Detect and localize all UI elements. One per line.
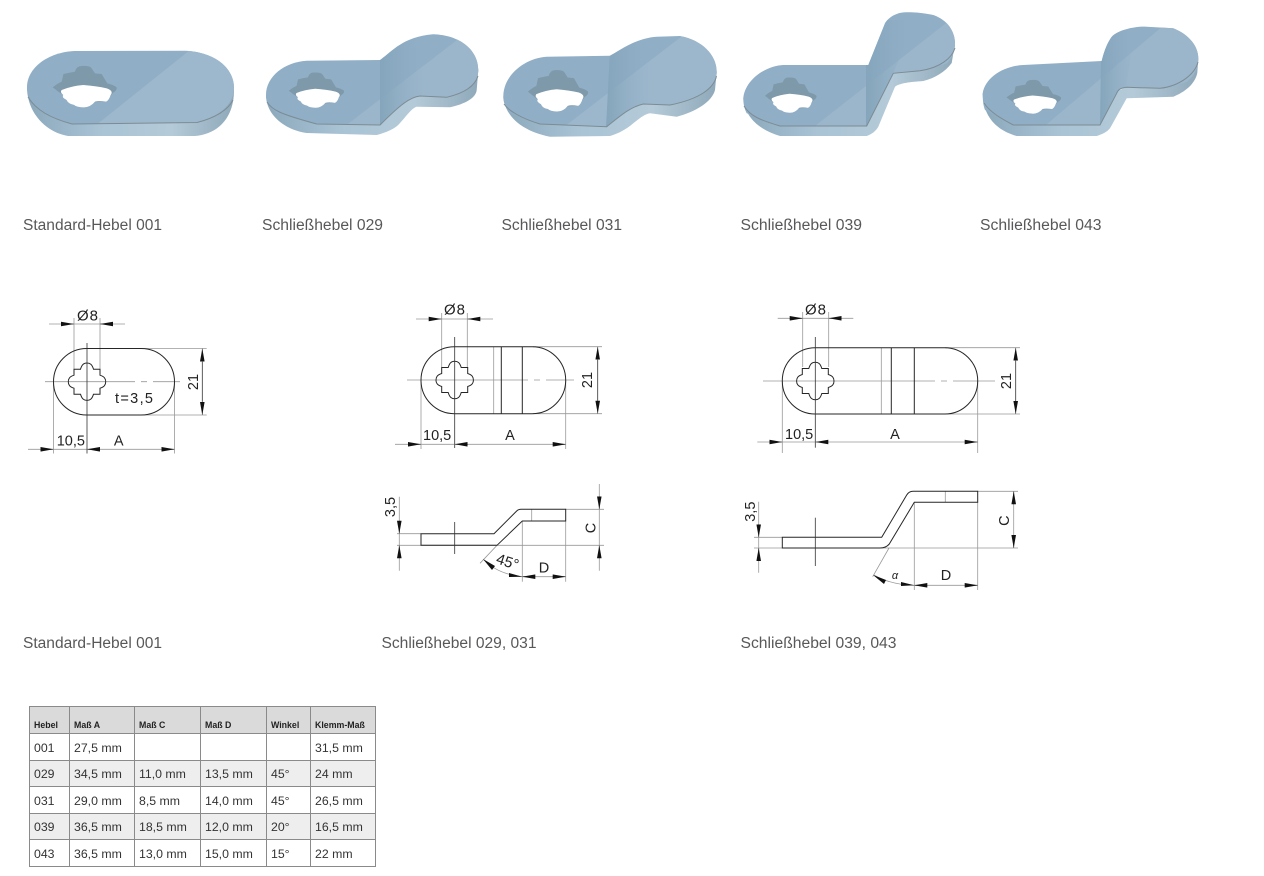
drawing: Standard-Hebel 001 top view: 21 <box>186 374 202 390</box>
drawing: Schließhebel 029, 031 top view <box>395 302 602 449</box>
drawing: Schließhebel 039, 043 top view: A <box>890 427 900 443</box>
table: lever dimensions: 8,5 mm <box>139 794 180 808</box>
drawing: Schließhebel 029, 031 side view: 3,5 <box>383 497 399 517</box>
table: lever dimensions: Klemm-Maß <box>315 720 365 730</box>
table: lever dimensions: 15° <box>271 847 290 861</box>
table: lever dimensions: 043 <box>34 847 55 861</box>
table: lever dimensions: 31,5 mm <box>315 741 363 755</box>
table: lever dimensions: Maß D <box>205 720 231 730</box>
table: lever dimensions: 13,5 mm <box>205 767 253 781</box>
table: lever dimensions: 36,5 mm <box>74 820 122 834</box>
table: lever dimensions: 14,0 mm <box>205 794 253 808</box>
photo: Standard-Hebel 001 <box>27 50 240 136</box>
drawing: Schließhebel 039, 043 side view: C <box>997 515 1013 526</box>
drawing: Schließhebel 029, 031 side view: 45° <box>494 551 521 574</box>
drawing: Schließhebel 039, 043 side view: D <box>941 568 951 584</box>
drawing: Schließhebel 039, 043 side view <box>743 491 1018 590</box>
table: lever dimensions: 11,0 mm <box>139 767 186 781</box>
table: lever dimensions: 45° <box>271 794 290 808</box>
drawing: Standard-Hebel 001 top view: 10,5 <box>57 434 85 450</box>
table: lever dimensions: 12,0 mm <box>205 820 253 834</box>
captions: drawing row: Schließhebel 039, 043 <box>740 635 896 652</box>
table: lever dimensions: Hebel <box>34 720 58 730</box>
drawing: Standard-Hebel 001 top view: A <box>114 434 124 450</box>
drawing: Schließhebel 029, 031 top view: Ø 8 <box>444 302 465 318</box>
captions: drawing row <box>23 635 896 652</box>
photo: Schließhebel 043 <box>983 20 1205 136</box>
drawing: Schließhebel 029, 031 top view: A <box>505 428 515 444</box>
captions: photo row <box>23 217 1102 234</box>
table: lever dimensions: 15,0 mm <box>205 847 253 861</box>
drawing: Schließhebel 039, 043 top view <box>757 302 1020 453</box>
drawing: Schließhebel 039, 043 side view: α <box>892 570 899 582</box>
drawing: Schließhebel 029, 031 side view <box>383 484 604 582</box>
captions: photo row: Schließhebel 039 <box>740 217 862 234</box>
drawing: Standard-Hebel 001 top view <box>28 308 207 454</box>
table: lever dimensions: 22 mm <box>315 847 353 861</box>
table: lever dimensions: 24 mm <box>315 767 353 781</box>
table: lever dimensions: 20° <box>271 820 290 834</box>
photo: Schließhebel 031 <box>503 30 725 137</box>
table: lever dimensions: 031 <box>34 794 55 808</box>
captions: photo row: Schließhebel 031 <box>502 217 622 234</box>
table: lever dimensions: 18,5 mm <box>139 820 187 834</box>
captions: photo row: Standard-Hebel 001 <box>23 217 162 234</box>
table: lever dimensions: 36,5 mm <box>74 847 122 861</box>
photo: Schließhebel 029 <box>266 30 490 135</box>
table: lever dimensions: 039 <box>34 820 55 834</box>
table: lever dimensions: 16,5 mm <box>315 820 363 834</box>
captions: drawing row: Standard-Hebel 001 <box>23 635 162 652</box>
table: lever dimensions: 029 <box>34 767 55 781</box>
table: lever dimensions: 001 <box>34 741 55 755</box>
table: lever dimensions: Winkel <box>271 720 299 730</box>
table: lever dimensions: 29,0 mm <box>74 794 122 808</box>
table: lever dimensions <box>29 706 376 866</box>
photo: Schließhebel 039 <box>743 12 965 136</box>
table: lever dimensions: Maß C <box>139 720 165 730</box>
panel: product photos <box>27 12 1205 137</box>
drawing: Schließhebel 039, 043 top view: 10,5 <box>785 427 813 443</box>
captions: drawing row: Schließhebel 029, 031 <box>382 635 536 652</box>
drawing: Schließhebel 029, 031 side view: C <box>584 523 600 533</box>
drawing: Schließhebel 029, 031 top view: 21 <box>580 372 596 388</box>
drawing: Schließhebel 039, 043 top view: 21 <box>999 373 1015 389</box>
table: lever dimensions: 26,5 mm <box>315 794 363 808</box>
table: lever dimensions: 34,5 mm <box>74 767 122 781</box>
drawing: Schließhebel 029, 031 top view: 10,5 <box>423 428 451 444</box>
captions: photo row: Schließhebel 029 <box>262 217 383 234</box>
table: lever dimensions: Maß A <box>74 720 100 730</box>
drawing: Standard-Hebel 001 top view: Ø 8 <box>77 308 98 324</box>
table: lever dimensions: 27,5 mm <box>74 741 122 755</box>
captions: photo row: Schließhebel 043 <box>980 217 1102 234</box>
table: lever dimensions: 13,0 mm <box>139 847 187 861</box>
drawing: Schließhebel 029, 031 side view: D <box>539 561 549 577</box>
drawing: Standard-Hebel 001 top view: t=3,5 <box>115 391 153 407</box>
drawing: Schließhebel 039, 043 top view: Ø 8 <box>805 302 826 318</box>
table: lever dimensions: 45° <box>271 767 290 781</box>
drawing: Schließhebel 039, 043 side view: 3,5 <box>743 502 759 522</box>
